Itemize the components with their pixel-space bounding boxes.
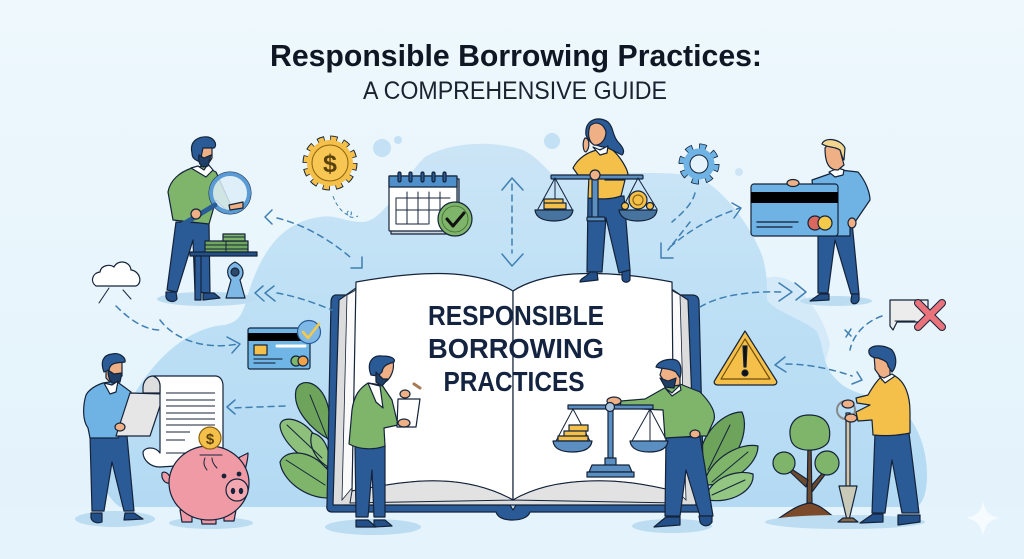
book heading [428,300,604,397]
arrow: vertical double [502,178,523,266]
arrow: gear down to book [661,193,695,258]
title: A COMPREHENSIVE GUIDE [363,77,667,105]
dashed arrows [116,178,882,414]
decorative bubbles [373,133,743,176]
piggy bank with coin: $ [206,431,215,448]
title: Responsible Borrowing Practices: [270,38,762,73]
arrow: scroll [227,400,285,414]
page bottoms [350,481,678,503]
pages right [513,273,674,500]
ground band [0,507,1024,559]
book heading: PRACTICES [444,366,584,397]
icon: dollar gear coin [306,139,358,217]
arrow: left to magnifier [265,210,362,268]
tree sapling [773,415,840,522]
plant left of book [280,383,330,498]
icon: warning triangle [714,331,777,385]
table with money [190,234,257,300]
book cover [327,295,704,520]
figure: man in green jacket with clipboard [325,356,421,535]
table balance scale [553,402,668,477]
title [270,38,762,105]
sparkle watermark [966,501,1000,536]
pages left [352,273,513,500]
figure: man holding credit card [751,139,872,306]
plant right of book [699,412,758,501]
icon: speech bubble with red X [890,300,942,330]
arrow: cloud to small card [116,306,240,353]
icon: dollar gear coin: $ [323,150,337,178]
arrow: bubble to person [845,316,882,350]
background cloud blob: pale lobe [750,277,830,380]
icon: small gear [682,147,716,181]
icon: calendar with check [389,172,472,236]
figure: man with magnifying glass [157,137,257,306]
arrow: to credit card [670,203,741,247]
arrow: warning to person [775,357,862,384]
figure: man with table scale [607,359,714,533]
arrow: double to magnifier table [255,286,332,310]
icon: lock keyhole [226,262,245,298]
icon: cloud [93,262,140,303]
book heading: BORROWING [428,333,604,364]
background cloud blob: main blue layer [103,144,927,507]
figure: man with shovel [765,346,925,529]
figure: man with paper [75,354,164,527]
scroll document [143,376,223,467]
page stack [333,288,696,505]
book heading: RESPONSIBLE [428,300,604,331]
small credit card with check [248,320,320,369]
arrow: book to right [700,283,806,307]
book [327,273,704,520]
piggy bank with coin [162,427,253,529]
figure: woman with balance scale [535,119,657,282]
